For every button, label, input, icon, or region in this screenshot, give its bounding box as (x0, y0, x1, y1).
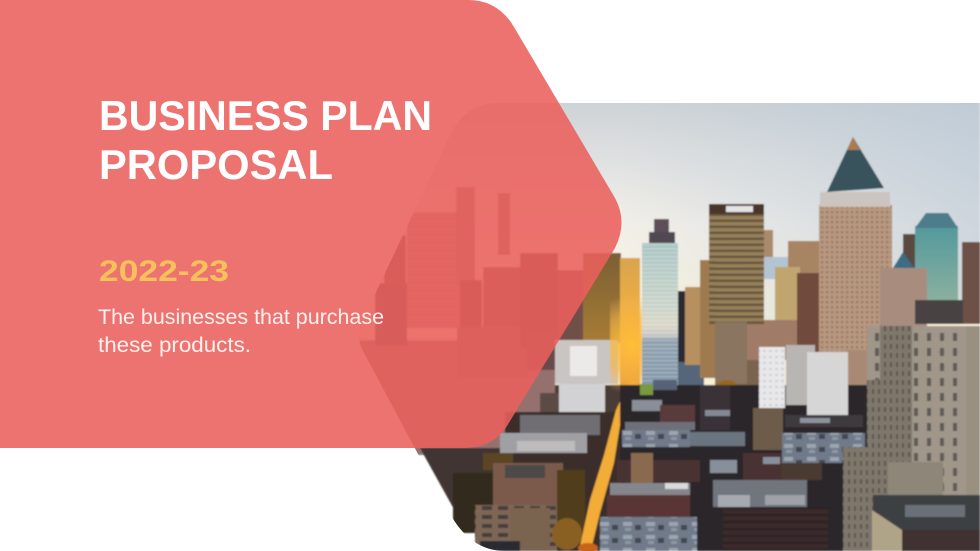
street trees (551, 380, 738, 551)
glass tower (642, 219, 704, 392)
teal tower (880, 213, 980, 328)
title: BUSINESS PLAN (99, 92, 432, 139)
city photo (340, 100, 980, 551)
central city blocks (600, 380, 880, 551)
foreground tower (843, 326, 980, 551)
sunrise glow (609, 298, 643, 392)
description: The businesses that purchase (98, 306, 384, 329)
upper-right low-rise blocks (753, 345, 865, 480)
golden street (579, 401, 622, 546)
white mid-rise buildings (540, 340, 618, 415)
Allianz tower (709, 204, 764, 384)
pyramid-roof tower (819, 137, 892, 402)
description: these products. (98, 334, 251, 357)
title: PROPOSAL (99, 141, 333, 188)
coral hexagon panel (0, 0, 622, 448)
year: 2022-23 (99, 255, 229, 288)
lower-left city blocks (420, 412, 630, 551)
left skyline (355, 187, 640, 455)
mid brown towers (685, 230, 820, 385)
